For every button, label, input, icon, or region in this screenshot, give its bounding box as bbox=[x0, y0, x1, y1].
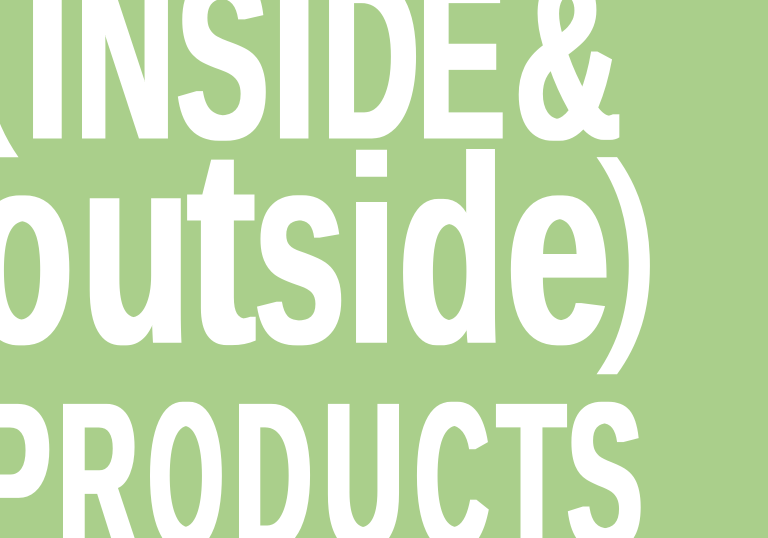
heading line: outside): ) bbox=[598, 115, 659, 377]
heading line: outside): i bbox=[345, 102, 398, 399]
heading line: outside): d bbox=[398, 101, 505, 399]
heading line: outside): t bbox=[187, 89, 256, 402]
heading line: (INSIDE& bbox=[0, 0, 621, 188]
heading line: outside): u bbox=[81, 95, 191, 401]
heading line: outside): e bbox=[506, 95, 610, 401]
heading line: outside) bbox=[0, 89, 659, 402]
heading line: outside): s bbox=[254, 95, 346, 401]
heading line: PRODUCTS bbox=[0, 358, 642, 538]
